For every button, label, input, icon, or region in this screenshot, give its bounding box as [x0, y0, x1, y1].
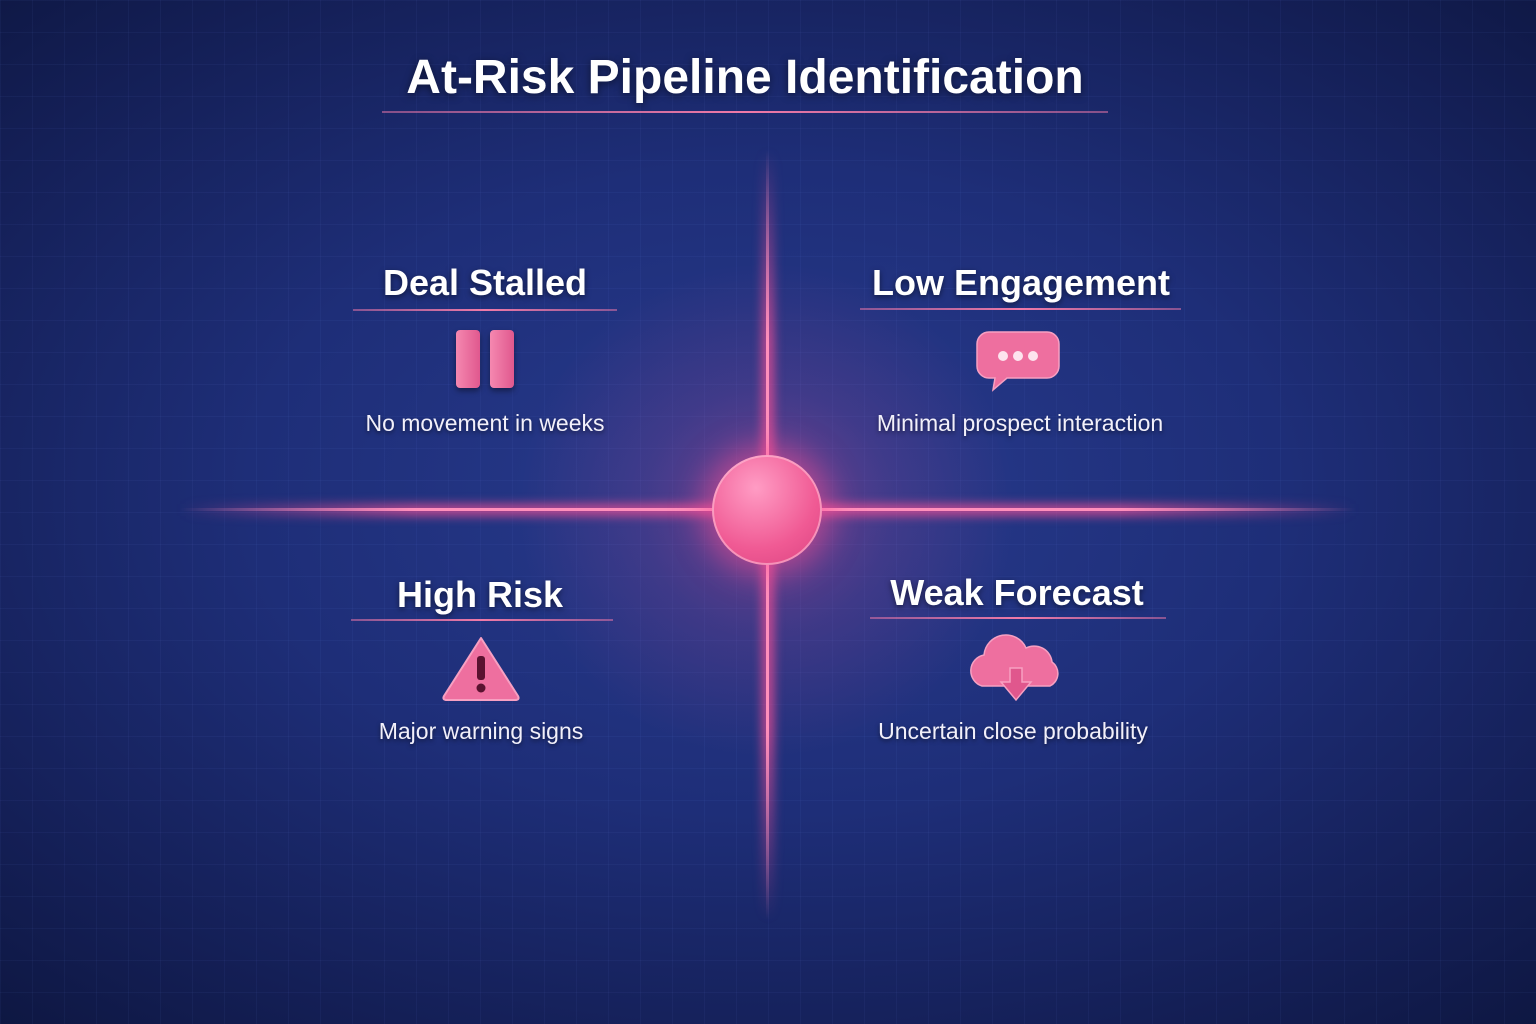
title: At-Risk Pipeline Identification — [406, 51, 1084, 104]
icon: pause — [453, 330, 517, 394]
description: No movement in weeks — [365, 410, 605, 436]
center glow — [517, 260, 1017, 760]
panel: Deal Stalled — [353, 262, 617, 436]
vertical axis line — [754, 155, 782, 916]
heading: Low Engagement: Low Engagement — [872, 262, 1170, 303]
icon: chat bubble — [976, 331, 1060, 392]
description: Uncertain close probability — [878, 718, 1148, 744]
icon: warning triangle — [442, 637, 520, 701]
heading: High Risk: High Risk — [397, 574, 563, 615]
description: Major warning signs — [379, 718, 583, 744]
panel: High Risk — [351, 574, 613, 748]
panel: Weak Forecast — [870, 572, 1166, 747]
center orb — [712, 455, 822, 565]
heading: Weak Forecast: Weak Forecast — [890, 572, 1144, 613]
icon: cloud download — [970, 634, 1059, 701]
panel: Low Engagement — [860, 262, 1181, 439]
horizontal axis line — [186, 496, 1350, 524]
description: Minimal prospect interaction — [877, 410, 1163, 436]
heading: Deal Stalled: Deal Stalled — [383, 262, 587, 303]
